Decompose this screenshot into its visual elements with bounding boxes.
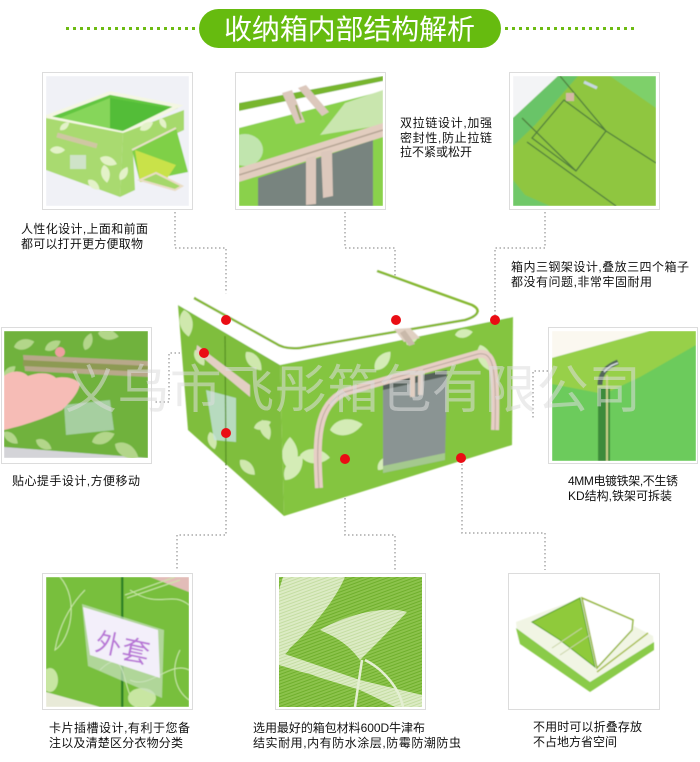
text: double zipper caption: 拉不紧或松开: [400, 144, 472, 159]
panel: card slot photo: 套: [119, 634, 153, 670]
heading: title pill with dotted lines: [66, 9, 635, 48]
panel: card slot photo: [42, 574, 192, 710]
main product: green storage box: [178, 270, 513, 516]
text: double zipper caption: 密封性,防止拉链: [400, 130, 492, 145]
panel: iron frame close-up photo: [548, 328, 698, 464]
top zipper pull: [394, 328, 420, 346]
text: steel frame caption: 箱内三钢架设计,叠放三四个箱子: [511, 259, 689, 274]
box lid with green trim: [178, 270, 513, 365]
text: card slot caption: 注以及清楚区分衣物分类: [49, 735, 183, 750]
box right face with zipper and window: [279, 317, 513, 516]
text: steel frame caption: 都没有问题,非常牢固耐用: [511, 274, 652, 289]
panel: fabric material close-up photo: [276, 574, 426, 710]
text: double zipper caption: [400, 115, 492, 159]
panel: inner steel frame photo: [510, 72, 660, 210]
heading: title pill with dotted lines: 收纳箱内部结构解析: [224, 14, 475, 45]
box left face: [178, 305, 284, 516]
red marker dots: [199, 315, 500, 464]
text: steel frame caption: [511, 259, 689, 289]
text: fabric material caption: 结实耐用,内有防水涂层,防霉防潮防虫: [253, 735, 461, 750]
panel: double zipper photo: [227, 72, 386, 210]
text: fabric material caption: 选用最好的箱包材料600D牛津布: [253, 720, 425, 735]
text: fabric material caption: [253, 720, 461, 750]
panel: card slot photo: 外: [93, 627, 124, 661]
text: folded box caption: 不用时可以折叠存放: [533, 719, 642, 734]
text: card slot caption: 卡片插槽设计,有利于您备: [49, 720, 190, 735]
dotted connector lines: [155, 212, 548, 570]
text: carry handle caption: 贴心提手设计,方便移动: [12, 473, 140, 488]
panel: carry handle photo: [1, 328, 151, 464]
text: folded box caption: [533, 719, 642, 749]
text: iron frame caption: [568, 474, 678, 503]
panel: open box photo: [42, 72, 192, 210]
text: card slot caption: [49, 720, 190, 750]
text: open top and front caption: 都可以打开更方便取物: [21, 236, 143, 251]
watermark: 义乌市飞彤箱包有限公司: [65, 362, 641, 420]
text: open top and front caption: [21, 221, 148, 251]
panel: folded box photo: [508, 574, 660, 710]
text: open top and front caption: 人性化设计,上面和前面: [21, 221, 148, 236]
text: folded box caption: 不占地方省空间: [533, 734, 617, 749]
text: iron frame caption: 4MM电镀铁架,不生锈: [568, 474, 678, 488]
text: iron frame caption: KD结构,铁架可拆装: [568, 488, 672, 503]
text: double zipper caption: 双拉链设计,加强: [400, 115, 492, 130]
